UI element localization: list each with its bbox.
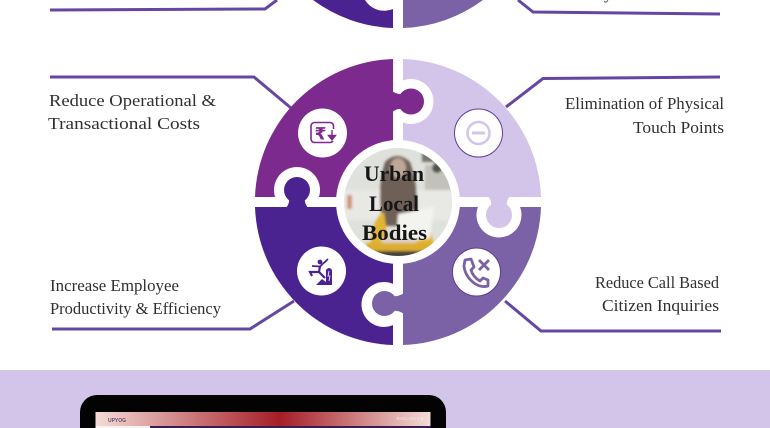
text: employee productivity: Increase Employee: [50, 276, 179, 295]
text: employee productivity: [50, 276, 221, 318]
text: reduce operational costs: Transactional Costs: [48, 114, 200, 133]
language selector: ENGLISH ▾ ▮: [396, 416, 424, 421]
icon: call blocked: [452, 248, 500, 296]
connector: physical touch points: [506, 77, 720, 107]
badge label: Bodies: [362, 220, 427, 245]
tab: top left into top right: [392, 88, 424, 114]
badge label: Local: [369, 191, 419, 216]
icon: rupee cost reduction: [298, 108, 347, 158]
tablet screen header: [96, 412, 430, 426]
text: employee productivity: Productivity & Efficiency: [50, 299, 221, 318]
badge label: Urban: [364, 161, 424, 186]
tablet mockup: [80, 395, 446, 428]
top puzzle fragment: [313, 0, 483, 28]
badge photo: [344, 148, 452, 256]
top right connector line: [518, 0, 720, 14]
badge label: [362, 161, 427, 245]
text: reduce call inquiries: Citizen Inquiries: [602, 296, 719, 315]
text: elimination of physical touch points: Touch Points: [633, 118, 724, 137]
text: reduce call inquiries: Reduce Call Based: [595, 273, 719, 292]
text: elimination of physical touch points: Elimination of Physical: [565, 94, 724, 113]
tab cut-outs: [274, 79, 522, 327]
icon: no touch points: [454, 109, 502, 157]
badge ring: [336, 140, 460, 264]
center badge: [336, 140, 460, 264]
text: reduce operational costs: [48, 91, 216, 133]
connector: operational costs: [50, 77, 291, 108]
connector: citizen inquiries: [505, 301, 721, 331]
text: elimination of physical touch points: [565, 94, 724, 137]
icon: employee productivity: [297, 246, 346, 296]
tab: bottom right into bottom left: [372, 291, 404, 316]
connector: employee productivity: [52, 301, 294, 329]
piece: bottom right: [403, 207, 541, 345]
piece: bottom left: [255, 207, 393, 345]
puzzle circle: [255, 59, 541, 345]
piece: top left: [255, 59, 393, 197]
piece: top right: [403, 59, 541, 197]
bottom band: [0, 370, 770, 428]
icon: rupee cost reduction: ₹: [315, 124, 326, 144]
text: reduce call inquiries: [595, 273, 719, 315]
tab: top right into bottom right: [486, 196, 512, 228]
text: reduce operational costs: Reduce Operational &: [49, 91, 216, 110]
site logo: UPYOG: [108, 418, 126, 424]
tab: bottom left into top left: [284, 177, 310, 208]
tablet body: [80, 395, 446, 428]
screen sidebar: [96, 426, 150, 428]
screen banner: [150, 426, 430, 428]
top left connector line: [50, 0, 277, 10]
